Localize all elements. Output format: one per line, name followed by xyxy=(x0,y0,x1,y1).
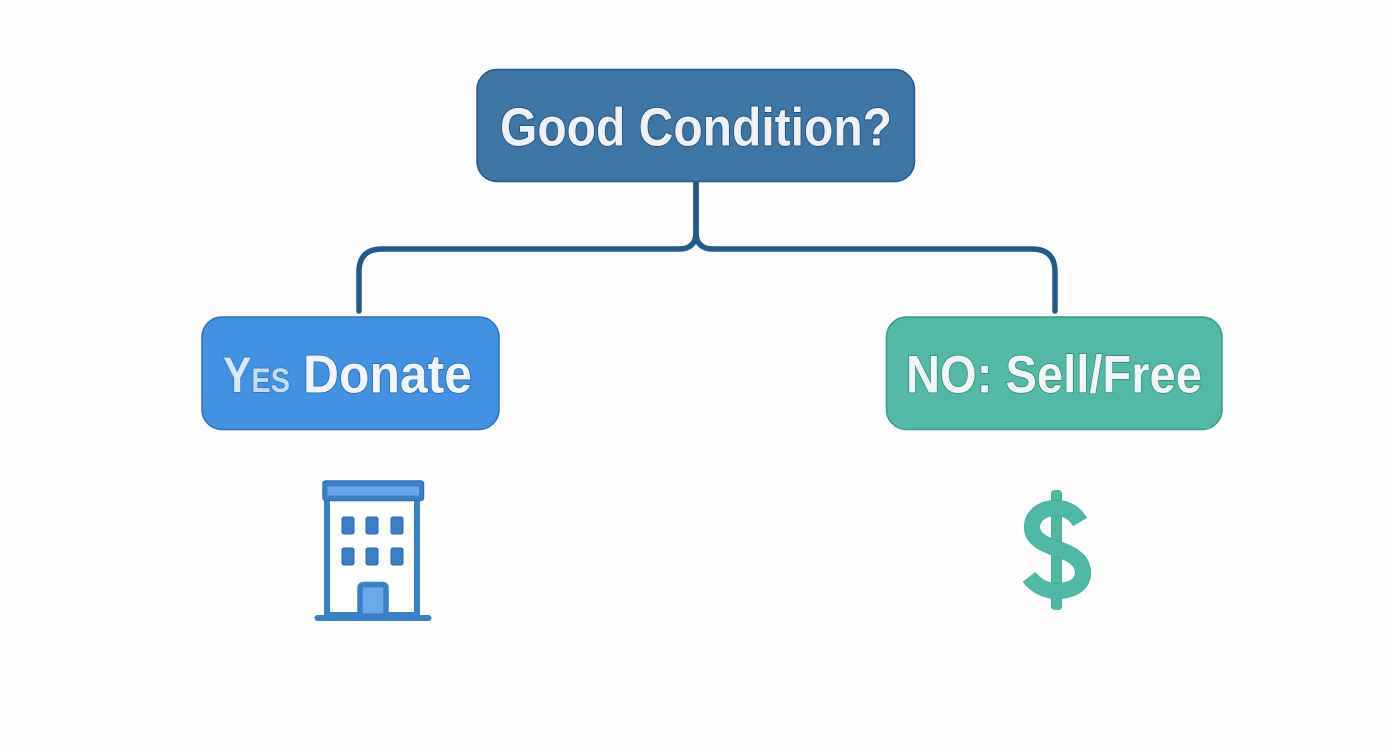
node: No Sell/Free xyxy=(886,317,1222,430)
icon: dollar sign xyxy=(1029,490,1083,610)
windows xyxy=(342,517,403,565)
label: Yes: YES xyxy=(223,347,290,403)
label: Donate: Donate xyxy=(303,344,472,404)
ground line xyxy=(314,615,432,621)
connector: decision tree branches xyxy=(359,181,1055,311)
node: Yes Donate xyxy=(202,317,499,430)
door xyxy=(360,584,386,616)
icon: building xyxy=(314,481,432,621)
roof xyxy=(323,481,424,500)
node: Good Condition? xyxy=(477,70,914,182)
node: Good Condition?: Good Condition? xyxy=(500,98,892,158)
node: No Sell/Free: NO: Sell/Free xyxy=(906,346,1202,404)
walls xyxy=(327,495,417,615)
